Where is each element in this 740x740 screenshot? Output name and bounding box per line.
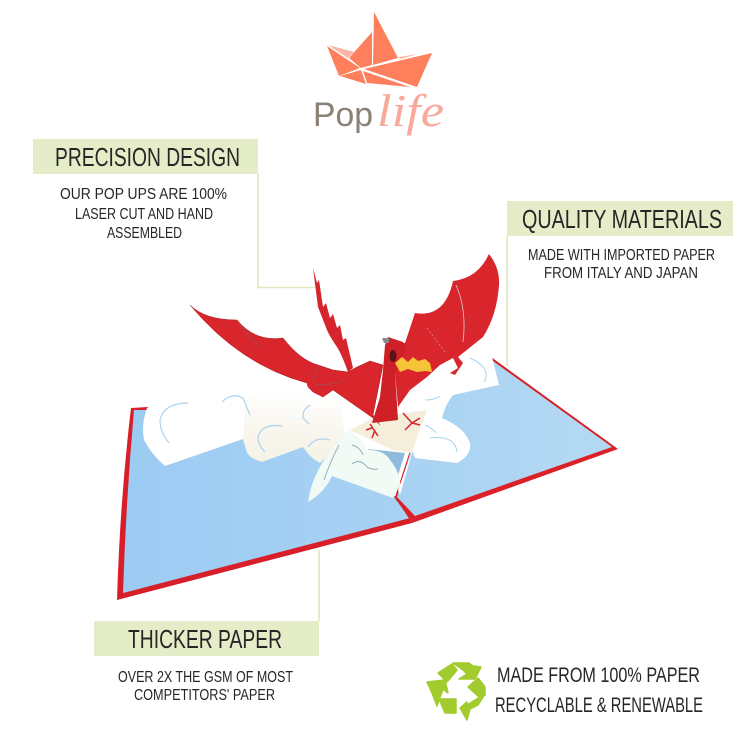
connector lines (258, 174, 507, 621)
logo: Poplife: life (377, 85, 444, 136)
panel: recycling note (427, 663, 703, 720)
claws (366, 413, 420, 438)
flame (395, 357, 432, 372)
icon: origami boat (327, 12, 432, 87)
text: precision design description: LASER CUT AND HAND (75, 206, 213, 223)
left wing (190, 305, 383, 425)
panel: precision design (33, 139, 258, 242)
tail (313, 268, 353, 372)
left wing ribs (239, 324, 344, 384)
body and neck (372, 337, 406, 423)
heading: precision design: PRECISION DESIGN (55, 142, 240, 172)
dragon (190, 254, 499, 438)
text: recycling note (495, 664, 703, 717)
illustration: dragon pop-up card (117, 254, 618, 600)
text: precision design description (60, 186, 227, 242)
right wing ribs (427, 285, 464, 352)
icon: recycling arrows (427, 663, 485, 720)
heading: precision design (33, 139, 258, 174)
card left panel (117, 407, 412, 600)
centre pop-up box (350, 410, 427, 495)
text: precision design description: OUR POP UPS ARE 100% (60, 186, 227, 203)
text: quality materials description (528, 247, 715, 282)
clouds front (308, 430, 400, 502)
clouds left (143, 380, 345, 466)
heading: thicker paper (94, 621, 319, 656)
logo wordmark: Pop (313, 96, 373, 134)
clouds right (405, 357, 499, 463)
mouth (390, 350, 396, 362)
text: precision design description: ASSEMBLED (107, 225, 182, 242)
text: thicker paper description (118, 669, 293, 704)
panel: thicker paper (94, 621, 319, 704)
fold (395, 497, 411, 519)
heading: thicker paper: THICKER PAPER (128, 624, 282, 654)
text: quality materials description: FROM ITALY AND JAPAN (544, 265, 698, 282)
text: thicker paper description: OVER 2X THE GSM OF MOST (118, 669, 293, 686)
panel: quality materials (507, 201, 733, 282)
horn (382, 338, 389, 343)
right wing (395, 254, 499, 407)
text: thicker paper description: COMPETITORS' PAPER (134, 687, 275, 704)
logo: Poplife (313, 12, 444, 136)
card right panel (395, 357, 618, 523)
